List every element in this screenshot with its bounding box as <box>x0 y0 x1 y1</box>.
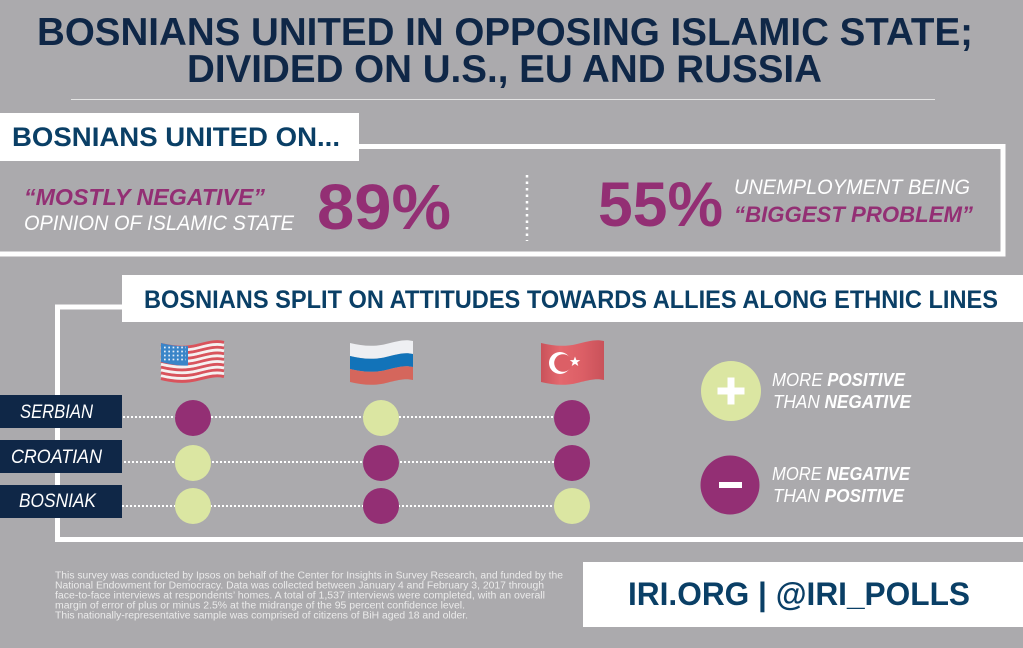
legend: more negative <box>700 456 911 514</box>
text: mostly negative opinion: OPINION OF ISLAMIC STATE <box>24 212 295 235</box>
icon: Turkish flag <box>541 340 604 385</box>
row: Bosniak <box>0 485 590 524</box>
icon: Russian flag <box>350 340 413 385</box>
heading: Bosnians united on <box>0 113 359 161</box>
row: Serbian: SERBIAN <box>20 402 93 423</box>
title: DIVIDED ON U.S., EU AND RUSSIA <box>187 48 822 91</box>
text: survey methodology: face-to-face interviews at respondents’ homes. A total of 1,537 interviews were completed, with an overall <box>55 590 545 602</box>
title <box>37 11 973 91</box>
callout: website and handle: IRI.ORG | @IRI_POLLS <box>628 576 970 612</box>
heading: split on attitudes <box>122 275 1023 322</box>
stat: 55 percent: 55% <box>598 170 723 240</box>
text: survey methodology <box>55 570 563 622</box>
legend: more negative: THAN POSITIVE <box>773 486 905 506</box>
text: unemployment biggest problem <box>734 176 973 227</box>
row: Serbian <box>0 395 590 436</box>
panel: attitudes towards allies <box>0 275 1023 540</box>
text: mostly negative opinion <box>24 184 295 235</box>
text: mostly negative opinion: “MOSTLY NEGATIVE” <box>24 184 265 210</box>
icon: US flag <box>161 342 224 381</box>
text: survey methodology: margin of error of plus or minus 2.5% at the midrange of the 95 percent confidence level. <box>55 600 465 612</box>
title: BOSNIANS UNITED IN OPPOSING ISLAMIC STATE; <box>37 11 973 54</box>
text: survey methodology: This nationally-representative sample was comprised of citizens of BiH aged 18 and older. <box>55 610 468 622</box>
heading: Bosnians united on: BOSNIANS UNITED ON... <box>12 122 340 152</box>
text: unemployment biggest problem: “BIGGEST PROBLEM” <box>734 202 973 227</box>
text: survey methodology: This survey was conducted by Ipsos on behalf of the Center for Insights in Survey Research, and funded by the <box>55 570 563 582</box>
legend: more positive <box>701 361 912 421</box>
stat: 89 percent: 89% <box>317 171 451 243</box>
legend: more positive: MORE POSITIVE <box>772 370 906 390</box>
row: Croatian <box>0 440 590 481</box>
panel: Bosnians united on <box>0 113 1003 254</box>
heading: split on attitudes: BOSNIANS SPLIT ON ATTITUDES TOWARDS ALLIES ALONG ETHNIC LINES <box>144 286 998 314</box>
row: Croatian: CROATIAN <box>11 447 102 468</box>
callout: website and handle <box>583 562 1023 627</box>
row: Bosniak: BOSNIAK <box>19 491 97 512</box>
legend: more negative: MORE NEGATIVE <box>772 464 911 484</box>
legend: more positive: THAN NEGATIVE <box>773 392 912 412</box>
text: survey methodology: National Endowment for Democracy. Data was collected between January 4 and February 3, 2017 through <box>55 580 544 592</box>
text: unemployment biggest problem: UNEMPLOYMENT BEING <box>734 176 970 199</box>
